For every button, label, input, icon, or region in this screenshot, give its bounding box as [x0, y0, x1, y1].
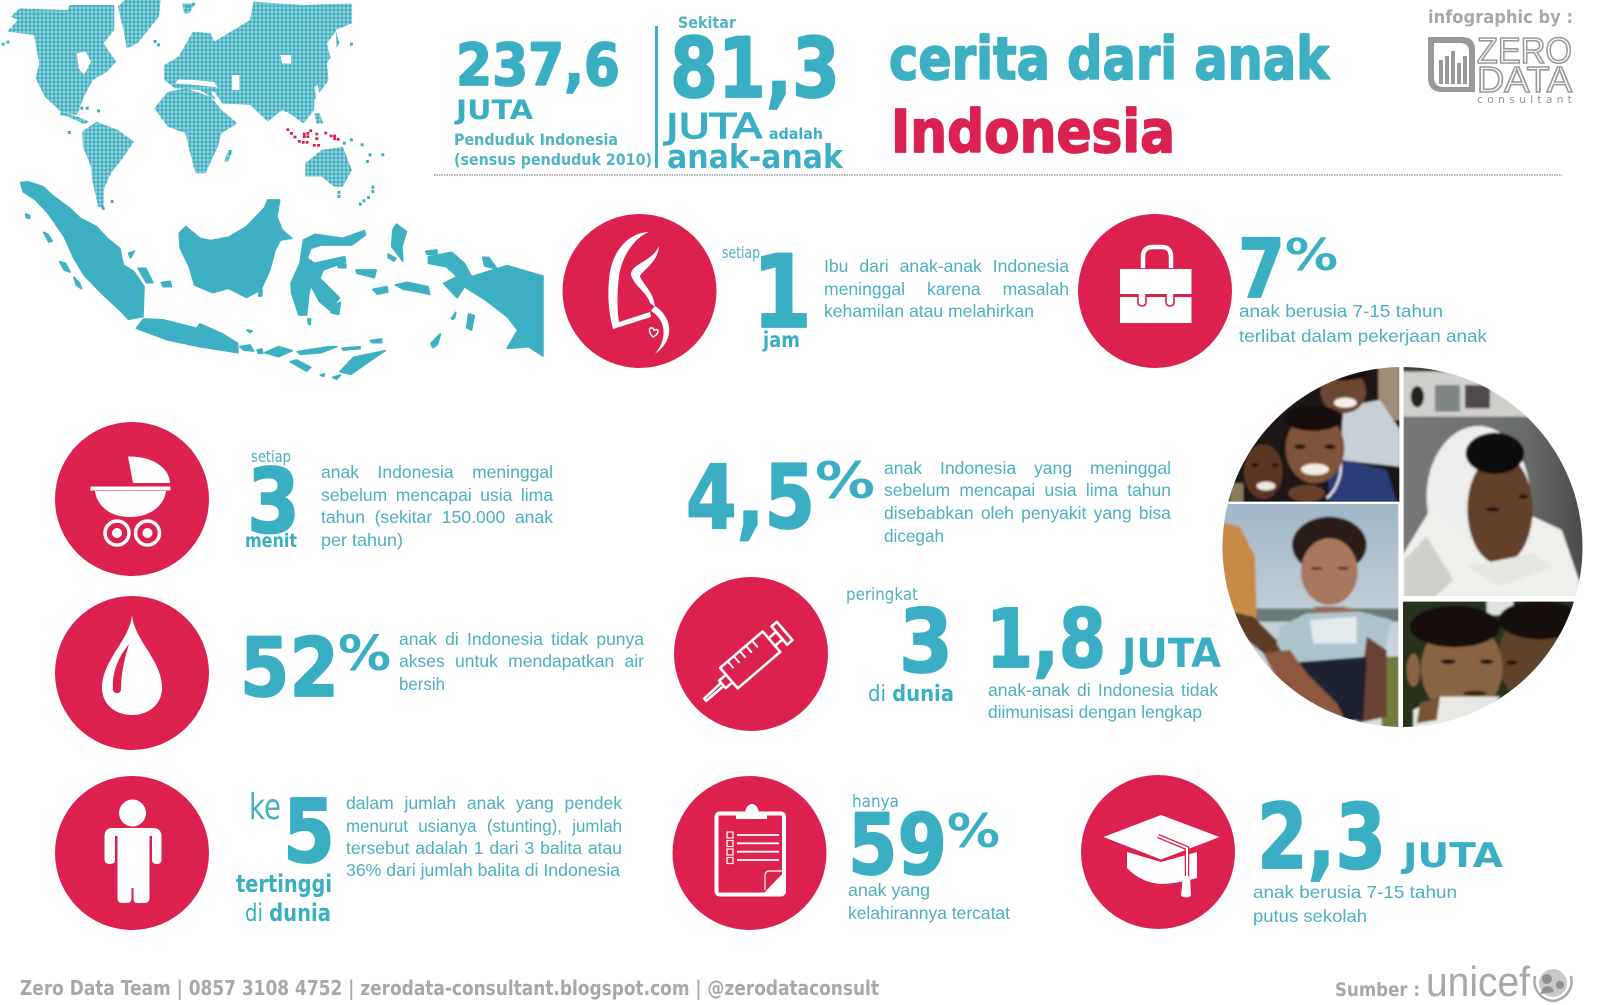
- icon: graduation cap: [1081, 775, 1235, 929]
- title: cerita dari anak: [889, 24, 1330, 93]
- icon: syringe: [674, 577, 828, 731]
- text: stunting: [346, 793, 622, 880]
- text: stunting: dalam jumlah anak yang pendek: [346, 793, 622, 813]
- stat: rank 3 in the world: peringkat: [846, 585, 918, 605]
- stat: every 3 minutes: menit: [245, 530, 297, 552]
- text: stunting: 36% dari jumlah balita di Indonesia: [346, 860, 620, 880]
- credit: infographic by Zero Data: infographic by :: [1428, 7, 1573, 28]
- icon: baby stroller: [55, 422, 209, 576]
- text: immunisation: [988, 680, 1218, 722]
- credit: infographic by Zero Data: consultant: [1477, 93, 1573, 106]
- stat: 5th highest in the world: ke: [249, 787, 281, 828]
- stat: only 59%: %: [947, 804, 1000, 858]
- stat: 81,3 juta anak-anak: adalah: [769, 125, 823, 143]
- credit: infographic by Zero Data: DATA: [1477, 59, 1572, 100]
- stat: rank 3 in the world: [846, 585, 954, 707]
- stat: 7%: [1238, 223, 1338, 317]
- icon: zero data logo: [1428, 37, 1475, 92]
- stat: 81,3 juta anak-anak: JUTA: [663, 107, 762, 147]
- text: child labour: [1239, 301, 1487, 346]
- text: maternal death: kehamilan atau melahirkan: [824, 301, 1034, 321]
- stat: 2,3 juta: [1257, 785, 1504, 890]
- credit: infographic by Zero Data: [1428, 7, 1573, 106]
- stat: every 3 minutes: 3: [247, 449, 300, 553]
- stat: 5th highest in the world: tertinggi: [236, 870, 332, 898]
- source: unicef: [1335, 958, 1572, 1005]
- stat: 2,3 juta: JUTA: [1401, 836, 1504, 876]
- text: school dropouts: putus sekolah: [1253, 906, 1367, 926]
- text: preventable disease: disebabkan oleh penyakit yang bisa: [884, 503, 1171, 523]
- stat: 1,8 juta: JUTA: [1119, 631, 1221, 677]
- panel: immunisation rank 3: [674, 577, 1221, 731]
- stat: 5th highest in the world: 5: [283, 781, 335, 883]
- panel: child deaths every 3 minutes: [55, 422, 553, 576]
- panel: birth registration 59%: [672, 776, 1010, 930]
- text: child deaths: tahun (sekitar 150.000 anak: [321, 507, 553, 527]
- stat: 81,3 juta anak-anak: [663, 13, 844, 176]
- credit: infographic by Zero Data: ZERO: [1477, 30, 1572, 71]
- stat: population 237,6 juta: JUTA: [454, 95, 533, 126]
- source: unicef: Sumber :: [1335, 979, 1420, 1001]
- source: unicef: unicef: [1426, 958, 1530, 1005]
- panel: school dropouts 2,3 juta: [1081, 775, 1504, 929]
- text: preventable disease: [884, 458, 1171, 546]
- text: clean water: bersih: [399, 674, 445, 694]
- header divider: [655, 26, 658, 168]
- photo: girl in white headscarf: [1404, 367, 1582, 596]
- stat: 81,3 juta anak-anak: Sekitar: [678, 13, 736, 32]
- stat: 7%: %: [1285, 230, 1338, 281]
- title: [889, 24, 1330, 166]
- stat: population 237,6 juta: 237,6: [456, 31, 620, 99]
- stat: 7%: 7: [1238, 223, 1285, 317]
- stat: population 237,6 juta: [454, 31, 652, 169]
- stat: 52%: %: [338, 626, 391, 682]
- text: child labour: anak berusia 7-15 tahun: [1239, 301, 1443, 321]
- text: birth registration: anak yang: [848, 880, 930, 900]
- text: child labour: terlibat dalam pekerjaan anak: [1239, 326, 1487, 346]
- stat: 5th highest in the world: [236, 781, 335, 927]
- photo: laughing boys: [1228, 367, 1400, 502]
- text: maternal death: meninggal karena masalah: [824, 279, 1069, 299]
- Indonesia highlighted dots: [286, 128, 340, 147]
- text: child deaths: [321, 462, 553, 550]
- text: maternal death: Ibu dari anak-anak Indonesia: [824, 256, 1069, 276]
- stat: every 1 hour: 1: [752, 233, 812, 351]
- icon: water drop: [55, 596, 209, 750]
- Indonesia map: [21, 182, 543, 379]
- stat: 52%: 52: [240, 622, 339, 716]
- stat: only 59%: hanya: [852, 792, 899, 812]
- photo: two children close-up: [1403, 602, 1574, 727]
- panel: maternal death every hour: [562, 214, 1069, 368]
- stat: 1,8 juta: 1,8: [986, 593, 1106, 687]
- stat: every 1 hour: setiap: [722, 243, 760, 262]
- photo: girl with water: [1222, 504, 1398, 727]
- scattered dots: [2, 3, 384, 210]
- text: immunisation: diimunisasi dengan lengkap: [988, 702, 1202, 722]
- stat: only 59%: 59: [848, 796, 947, 894]
- stat: every 3 minutes: setiap: [251, 447, 291, 466]
- text: school dropouts: anak berusia 7-15 tahun: [1253, 882, 1457, 902]
- text: preventable disease: anak Indonesia yang meninggal: [884, 458, 1171, 478]
- panel: stunting rank 5: [55, 776, 622, 930]
- stat: every 1 hour: [722, 233, 812, 352]
- text: school dropouts: [1253, 882, 1457, 926]
- icon: unicef emblem: [1534, 969, 1572, 1001]
- world dot map: [2, 0, 384, 210]
- icon: clipboard: [672, 776, 826, 930]
- text: clean water: [399, 629, 644, 694]
- text: preventable disease: dicegah: [884, 526, 944, 546]
- stat: rank 3 in the world: di dunia: [868, 682, 954, 707]
- text: child deaths: sebelum mencapai usia lima: [321, 485, 553, 505]
- stat: 4,5%: %: [815, 452, 875, 510]
- icon: briefcase: [1078, 214, 1232, 368]
- footer contact line: Zero Data Team | 0857 3108 4752 | zerodata-consultant.blogspot.com | @zerodataconsult: [20, 976, 879, 1000]
- photo collage of children: [1213, 363, 1600, 740]
- map holes: [77, 32, 337, 112]
- stat: 81,3 juta anak-anak: anak-anak: [667, 137, 844, 176]
- panel: child labour 7%: [1078, 214, 1487, 368]
- stat: population 237,6 juta: (sensus penduduk 2010): [454, 150, 652, 169]
- stat: population 237,6 juta: Penduduk Indonesia: [454, 130, 618, 149]
- panel: clean water 52%: [55, 596, 644, 750]
- text: clean water: anak di Indonesia tidak punya: [399, 629, 644, 649]
- panel: 4,5% preventable: [686, 446, 1171, 549]
- icon: pregnant mother: [562, 214, 716, 368]
- icon: child figure: [55, 776, 209, 930]
- text: stunting: menurut usianya (stunting), jumlah: [346, 816, 622, 836]
- text: child deaths: anak Indonesia meninggal: [321, 462, 553, 482]
- text: maternal death: [824, 256, 1069, 321]
- text: stunting: tersebut adalah 1 dari 3 balita atau: [346, 838, 622, 858]
- stat: every 1 hour: jam: [762, 328, 800, 352]
- stat: 2,3 juta: 2,3: [1257, 785, 1386, 890]
- text: clean water: akses untuk mendapatkan air: [399, 651, 644, 671]
- stat: 1,8 juta: [986, 593, 1221, 687]
- stat: 81,3 juta anak-anak: 81,3: [670, 20, 840, 117]
- text: child deaths: per tahun): [321, 530, 403, 550]
- stat: 4,5%: 4,5: [686, 446, 815, 549]
- text: birth registration: [848, 880, 1010, 923]
- text: immunisation: anak-anak di Indonesia tidak: [988, 680, 1218, 700]
- text: preventable disease: sebelum mencapai usia lima tahun: [884, 480, 1171, 500]
- stat: 5th highest in the world: di dunia: [245, 899, 331, 927]
- stat: rank 3 in the world: 3: [899, 591, 953, 693]
- title: Indonesia: [891, 97, 1175, 166]
- text: birth registration: kelahirannya tercatat: [848, 903, 1010, 923]
